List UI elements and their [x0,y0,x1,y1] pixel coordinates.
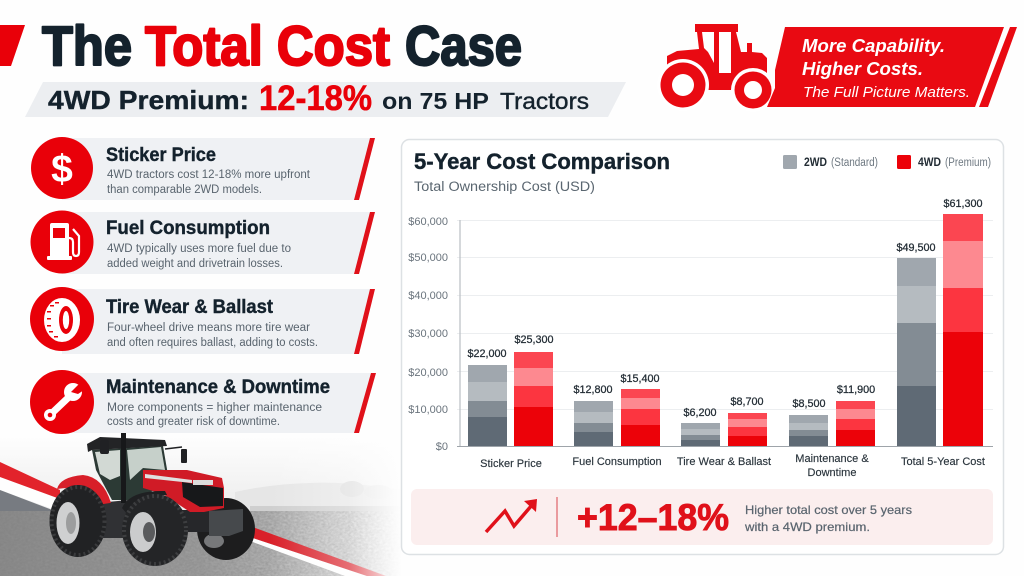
bars: fuel consumption: Fuel Consumption [572,456,662,468]
title accent [0,25,25,66]
y axis and gridlines: $40,000 [408,290,448,302]
bars: maintenance and downtime: $11,900 [837,384,875,396]
text: callout note [744,503,912,534]
panel: tire wear and ballast [30,287,375,354]
bars: total 5-year cost: Total 5-Year Cost [901,456,985,468]
white ribbon left [0,477,58,511]
y axis and gridlines: $60,000 [408,216,448,228]
panel: chart [402,140,1004,554]
text: sticker price [107,169,311,196]
front wheel [122,494,188,566]
text: percent range: +12–18% [577,497,729,538]
bars: sticker price: $25,300 [514,334,554,346]
bars: total 5-year cost: $49,500 [896,242,936,254]
panel: sticker price [31,137,375,200]
bars: fuel consumption: $15,400 [620,373,660,385]
bars: tire wear and ballast: $6,200 [683,407,717,419]
y axis and gridlines: $50,000 [408,252,448,264]
rear fender [57,475,111,503]
heading: tire wear and ballast: Tire Wear & Ballast [106,297,274,318]
bars: tire wear and ballast: $8,700 [730,396,764,408]
bars: maintenance and downtime: Downtime [808,467,856,479]
heading: fuel consumption: Fuel Consumption [106,218,270,239]
bars: maintenance and downtime [789,384,875,479]
bars: maintenance and downtime: $8,500 [792,398,826,410]
cab [87,433,187,503]
bars: tire wear and ballast [677,396,771,468]
text: tire wear and ballast [107,322,318,349]
bars: sticker price [467,334,554,470]
banner: more capability: The Full Picture Matters. [803,84,970,101]
panel: maintenance and downtime [30,370,376,434]
title: Total Cost [145,14,390,77]
red ribbon left [0,462,60,499]
icon: tire [30,287,94,351]
text: sticker price: 4WD tractors cost 12-18% more upfront [107,169,311,181]
bars: sticker price: Sticker Price [480,458,542,470]
text: sticker price: than comparable 2WD models. [107,184,262,196]
red ribbon right [250,526,386,576]
icon: dollar [31,137,93,199]
banner: more capability: More Capability. [802,35,945,56]
bars: total 5-year cost: $61,300 [943,198,983,210]
text: chart subtitle: Total Ownership Cost (USD) [414,179,595,194]
text: maintenance and downtime: costs and greater risk of downtime. [107,416,280,428]
ballast weight [209,509,243,536]
heading: maintenance and downtime: Maintenance & Downtime [106,377,330,398]
y axis and gridlines: $30,000 [408,328,448,340]
title [42,14,522,77]
y axis and gridlines: $20,000 [408,367,448,379]
text: maintenance and downtime: More components = higher maintenance [107,402,322,414]
legend [783,155,991,169]
heading: chart title: 5-Year Cost Comparison [414,149,670,174]
legend: 2WD [804,155,827,169]
text: tire wear and ballast: and often requires ballast, adding to costs. [107,337,318,349]
hood [143,470,224,512]
subtitle band: on 75 HP [382,88,489,114]
panel: fuel consumption [30,210,375,274]
heading: sticker price: Sticker Price [106,145,216,166]
icon: rising trend arrow [486,499,537,532]
text: callout note: with a 4WD premium. [744,520,870,534]
text: fuel consumption [107,243,291,270]
bars: tire wear and ballast: Tire Wear & Ballast [677,456,771,468]
text: maintenance and downtime [107,402,322,428]
y axis and gridlines [408,216,993,453]
text: fuel consumption: 4WD typically uses more fuel due to [107,243,291,255]
icon: red tractor silhouette [657,24,775,112]
tractor photo scene [0,433,402,576]
front fender [122,491,167,515]
text: fuel consumption: added weight and drivetrain losses. [107,258,283,270]
legend: (Standard) [831,157,878,169]
field [0,511,402,576]
subtitle band [25,79,626,118]
icon: wrench [30,370,94,434]
subtitle band: 4WD Premium: [48,85,249,115]
bars: sticker price: $22,000 [467,348,507,360]
chassis [98,500,128,538]
legend: 4WD [918,155,941,169]
far wheel [197,498,255,560]
y axis and gridlines: $0 [436,441,448,453]
bars: total 5-year cost [896,198,985,468]
callout: total premium [411,489,993,545]
tractor [50,433,255,566]
title: Case [405,14,522,77]
text: callout note: Higher total cost over 5 years [745,503,912,517]
icon: fuel pump [30,210,94,274]
title: The [42,14,132,77]
icon: dollar: $ [51,148,73,191]
distant hills [235,483,402,512]
rear wheel [50,485,106,557]
dark ribbon [0,490,55,511]
white ribbon right [250,537,367,576]
subtitle band: Tractors [500,88,589,114]
legend: (Premium) [945,157,991,169]
banner: more capability: Higher Costs. [802,58,923,79]
text: tire wear and ballast: Four-wheel drive means more tire wear [107,322,310,334]
banner: more capability [767,27,1017,107]
subtitle band: 12-18% [259,79,372,118]
bars: maintenance and downtime: Maintenance & [795,453,869,465]
bars: fuel consumption [572,373,662,468]
y axis and gridlines: $10,000 [408,404,448,416]
scene fade [270,436,402,576]
bars: fuel consumption: $12,800 [573,384,613,396]
